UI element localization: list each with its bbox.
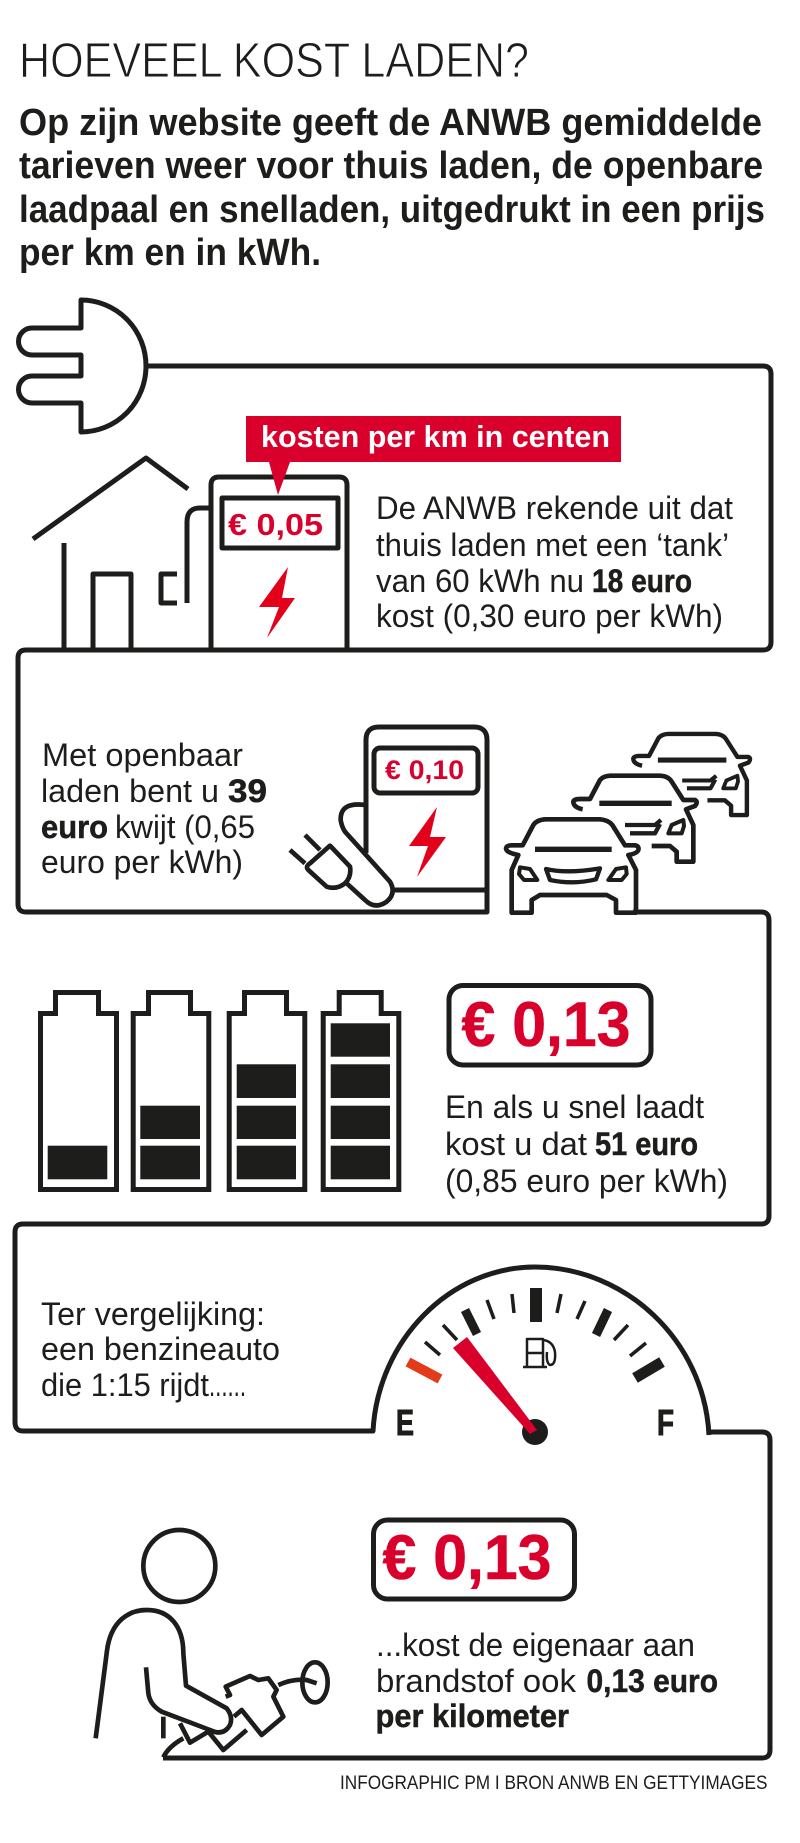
text: vergelijking: die 1:15 rijdt [41, 1367, 209, 1403]
text: thuis laden: kost (0,30 euro per kWh) [376, 598, 723, 634]
text: thuis laden: thuis laden met een ‘tank’ [376, 527, 729, 563]
low fuel mark [408, 1362, 440, 1379]
panel: snelladen [40, 986, 728, 1199]
chart: fuel gauge [396, 1288, 674, 1445]
gauge ticks [425, 1288, 662, 1378]
text: openbaar laden: kwijt (0,65 [115, 809, 255, 845]
text: openbaar laden: 39 [228, 773, 267, 809]
source credit: INFOGRAPHIC PM I BRON ANWB EN GETTYIMAGES [340, 1773, 768, 1794]
intro text: tarieven weer voor thuis laden, de openbare [19, 145, 763, 187]
intro text: per km en in kWh. [19, 232, 321, 274]
intro text: Op zijn website geeft de ANWB gemiddelde [19, 102, 762, 144]
icon: power plug [18, 300, 146, 432]
panel: openbaar laden [41, 727, 750, 913]
connector line from plug through panels [15, 366, 771, 1758]
icon: car front [506, 819, 639, 913]
text: thuis laden [376, 490, 733, 634]
icon: charging pump: € 0,05 [228, 507, 323, 542]
icon: charging pump [211, 477, 347, 650]
icon: battery 4 [323, 992, 399, 1190]
text: openbaar laden: euro per kWh) [41, 844, 243, 880]
text: thuis laden: van 60 kWh nu [376, 563, 584, 599]
icon: public charging pole [290, 727, 487, 905]
icon: public charging pole: € 0,10 [385, 755, 464, 785]
icon: car middle [573, 776, 697, 862]
icon: battery 2 [133, 992, 209, 1190]
text: snelladen [445, 1089, 728, 1199]
icon: house [33, 458, 210, 650]
gauge needle [453, 1337, 537, 1434]
price box: benzine: € 0,13 [382, 1523, 552, 1593]
text: snelladen: 51 euro [595, 1126, 698, 1162]
text: snelladen: kost u dat [445, 1126, 587, 1162]
needle hub [522, 1419, 548, 1445]
panel: benzineauto [41, 1288, 674, 1445]
text: openbaar laden: Met openbaar [42, 737, 243, 773]
title: HOEVEEL KOST LADEN? [19, 34, 529, 88]
icon: car back [633, 734, 750, 815]
callout: kosten per km in centen [246, 416, 621, 495]
text: benzine: brandstof ook [376, 1663, 577, 1699]
text: benzine: 0,13 euro [586, 1663, 718, 1699]
gauge letter E: E [396, 1402, 414, 1443]
text: vergelijking: een benzineauto [41, 1331, 280, 1367]
text: openbaar laden: laden bent u [41, 773, 219, 809]
icon: charging cable plug [290, 804, 393, 905]
text: vergelijking: Ter vergelijking: [41, 1296, 265, 1332]
callout: kosten per km in centen: kosten per km in centen [261, 419, 610, 454]
price box: snelladen: € 0,13 [462, 990, 630, 1060]
text: snelladen: En als u snel laadt [445, 1089, 704, 1125]
text: benzine [376, 1627, 718, 1734]
text: thuis laden: 18 euro [592, 563, 692, 599]
icon: cars in queue [506, 734, 750, 913]
text: benzine: per kilometer [376, 1698, 569, 1734]
panel: brandstof kosten [96, 1520, 718, 1757]
text: thuis laden: De ANWB rekende uit dat [376, 490, 733, 526]
panel: thuis laden [33, 416, 733, 650]
icon: person refuelling [96, 1530, 328, 1757]
icon: fuel nozzle [163, 1662, 328, 1757]
text: snelladen: (0,85 euro per kWh) [445, 1163, 728, 1199]
icon: battery 3 [229, 992, 305, 1190]
text: vergelijking [41, 1296, 280, 1403]
text: benzine: ...kost de eigenaar aan [376, 1627, 695, 1663]
text: openbaar laden: euro [41, 809, 108, 845]
gauge letter F: F [657, 1402, 674, 1443]
intro text [19, 102, 765, 274]
text: vergelijking: ...... [209, 1367, 246, 1403]
icon: battery 1 [40, 992, 116, 1190]
text: openbaar laden [41, 737, 267, 880]
icon: batteries [40, 992, 399, 1190]
icon: fuel pump [523, 1339, 555, 1367]
